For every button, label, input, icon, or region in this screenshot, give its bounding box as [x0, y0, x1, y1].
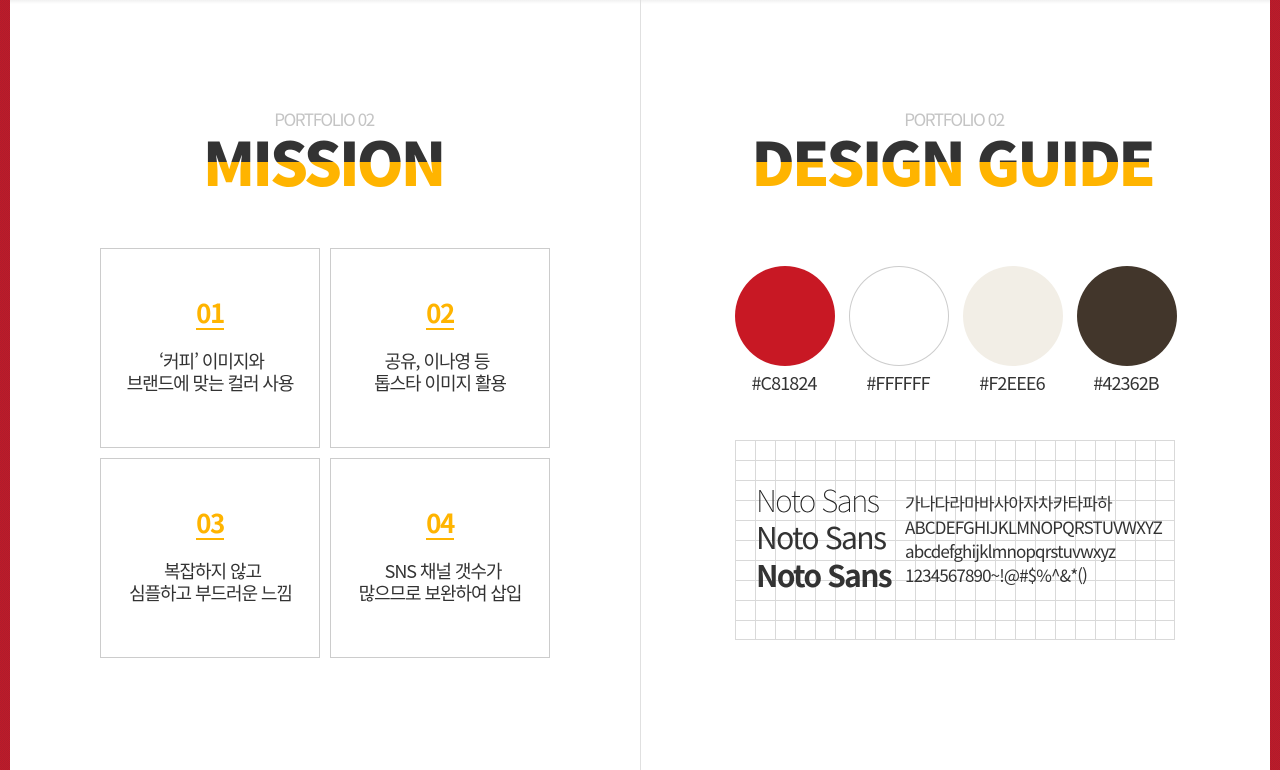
- left red bar: [0, 0, 10, 770]
- swatch: white: [849, 266, 949, 366]
- swatch: red: [735, 266, 835, 366]
- card 02: 톱스타 이미지 활용: [374, 370, 506, 396]
- card 02: 공유, 이나영 등: [385, 348, 489, 374]
- title: design guide: DESIGN GUIDE: [751, 117, 1153, 204]
- card 04: 04: [426, 504, 454, 541]
- glyphs: lowercase: abcdefghijklmnopqrstuvwxyz: [905, 538, 1115, 563]
- font sample: bold: Noto Sans: [756, 552, 891, 596]
- card 01: [100, 248, 320, 448]
- panel: mission cards: [100, 248, 550, 658]
- font sample: regular: Noto Sans: [756, 514, 885, 558]
- title: mission: MISSION: [203, 117, 443, 204]
- eyebrow: design guide: PORTFOLIO 02: [904, 106, 1004, 131]
- card 02: [330, 248, 550, 448]
- label: brown: #42362B: [1093, 370, 1159, 396]
- right red bar: [1270, 0, 1280, 770]
- swatch: cream: [963, 266, 1063, 366]
- glyphs: numerals and symbols: 1234567890~!@#$%^&*(): [905, 562, 1087, 587]
- card 01: 01: [196, 294, 224, 331]
- card 03: 심플하고 부드러운 느낌: [129, 580, 292, 606]
- card 01: 브랜드에 맞는 컬러 사용: [127, 370, 293, 396]
- center divider: [640, 0, 641, 770]
- card 02: 02: [426, 294, 454, 331]
- panel: typography grid: [735, 440, 1175, 640]
- eyebrow: mission: PORTFOLIO 02: [274, 106, 374, 131]
- title: mission: [123, 118, 523, 204]
- card 03: [100, 458, 320, 658]
- card 04: SNS 채널 갯수가: [385, 558, 501, 584]
- card 03: 03: [196, 504, 224, 541]
- font sample: light: Noto Sans: [756, 477, 878, 521]
- top shadow: [0, 0, 1280, 4]
- label: white: #FFFFFF: [866, 370, 930, 396]
- glyphs: hangul: 가나다라마바사아자차카타파하: [905, 490, 1112, 515]
- swatch: brown: [1077, 266, 1177, 366]
- card 03: 복잡하지 않고: [164, 558, 261, 584]
- label: red: #C81824: [751, 370, 817, 396]
- glyphs: uppercase: ABCDEFGHIJKLMNOPQRSTUVWXYZ: [905, 514, 1162, 539]
- label: cream: #F2EEE6: [979, 370, 1045, 396]
- card 04: [330, 458, 550, 658]
- card 04: 많으므로 보완하여 삽입: [359, 580, 521, 606]
- card 01: ‘커피’ 이미지와: [159, 348, 264, 374]
